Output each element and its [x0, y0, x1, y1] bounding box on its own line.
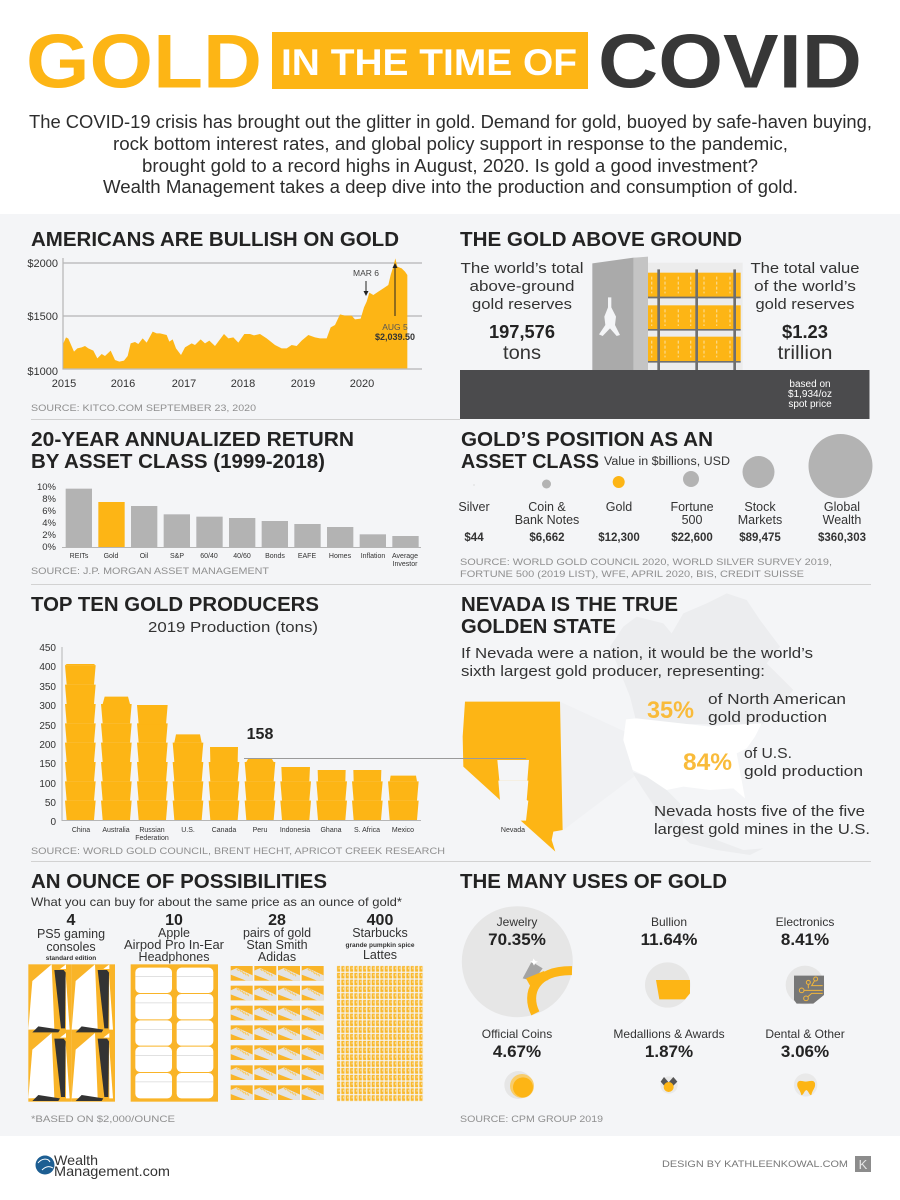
callout: Aug 5: AUG 5	[382, 322, 408, 332]
panel: the many uses of gold	[460, 871, 845, 1125]
bar chart: return by asset class: 4%	[42, 518, 57, 529]
stat: 84%	[683, 745, 863, 780]
text block: introduction: The COVID-19 crisis has brought out the glitter in gold. Demand for gold, buoyed by safe-haven buying,	[29, 112, 872, 132]
stat: 84%: gold production	[744, 763, 863, 780]
text block: Nevada mines: largest gold mines in the U.S.	[654, 821, 870, 838]
bubble chart: asset class size: 500	[682, 513, 702, 527]
bar chart: stacked gold bars by country: Mexico	[392, 827, 414, 834]
use: official coins: 4.67%	[493, 1042, 541, 1061]
subheading: What you can buy for about the same price as an ounce of gold*	[31, 895, 402, 909]
heading: annualized return: BY ASSET CLASS (1999-2018)	[31, 451, 325, 473]
use: dental and other	[765, 1027, 845, 1097]
column: Starbucks lattes: Starbucks	[352, 926, 408, 940]
dark ground bar with spot price note: spot price	[788, 399, 832, 410]
title	[26, 20, 862, 104]
bubble chart: asset class size	[458, 434, 872, 544]
use: bullion	[641, 915, 697, 1008]
bar chart: return by asset class: 60/40	[200, 553, 218, 560]
dark ground bar with spot price note: based on	[789, 379, 831, 390]
dark ground bar with spot price note: $1,934/oz	[788, 389, 832, 400]
bar chart: stacked gold bars by country: 350	[39, 682, 56, 693]
bar chart: return by asset class: Inflation	[361, 553, 385, 560]
chart: gold price area chart: 2017	[172, 378, 196, 390]
source: Kitco: SOURCE: KITCO.COM SEPTEMBER 23, 2020	[31, 403, 256, 414]
bar chart: stacked gold bars by country: 250	[39, 721, 56, 732]
credit: designer: DESIGN BY KATHLEENKOWAL.COM	[662, 1159, 848, 1170]
title: COVID	[598, 20, 862, 104]
chart: gold price area chart: $1500	[27, 311, 58, 323]
use: electronics	[776, 915, 834, 1004]
bar chart: stacked gold bars by country: Canada	[212, 827, 236, 834]
text block: reserves tonnage: tons	[503, 343, 541, 364]
shape: Nevada state	[463, 702, 563, 852]
bar chart: stacked gold bars by country: Ghana	[320, 827, 342, 834]
column: Starbucks lattes: Lattes	[363, 948, 397, 962]
footnote: *BASED ON $2,000/OUNCE	[31, 1114, 175, 1125]
bar chart: return by asset class: 8%	[42, 494, 57, 505]
panel: 20-year annualized return	[31, 429, 421, 577]
heading: possibilities: AN OUNCE OF POSSIBILITIES	[31, 871, 327, 893]
text block: reserves value: The total value	[750, 260, 860, 277]
column: AirPods	[124, 912, 224, 1102]
bubble chart: asset class size: Coin &	[528, 500, 566, 514]
callout: Peru comparison value: 158	[247, 726, 273, 743]
bar chart: stacked gold bars by country: S. Africa	[354, 827, 380, 834]
text block: Nevada intro: If Nevada were a nation, it would be the world’s	[461, 645, 813, 662]
chart: gold price area chart	[27, 258, 422, 390]
text block: Nevada intro: sixth largest gold producer, representing:	[461, 663, 765, 680]
heading: Nevada	[461, 594, 678, 638]
text block: Nevada mines	[654, 803, 870, 838]
stat: 35%: of North American	[708, 691, 846, 708]
heading: position: ASSET CLASS	[461, 451, 599, 473]
logo: WealthManagement.com: Wealth	[54, 1152, 98, 1168]
bar chart: stacked gold bars by country: 400	[39, 662, 56, 673]
bar chart: return by asset class: Homes	[329, 553, 352, 560]
bar chart: stacked gold bars by country: Peru	[253, 827, 267, 834]
bubble chart: asset class size: $44	[464, 532, 484, 544]
bar chart: stacked gold bars by country: Australia	[102, 827, 130, 834]
bar chart: return by asset class: 6%	[42, 506, 57, 517]
use: official coins: Official Coins	[482, 1027, 552, 1041]
bar chart: return by asset class	[37, 482, 421, 568]
bar chart: stacked gold bars by country: 200	[39, 740, 56, 751]
source: World Gold Council	[460, 557, 832, 580]
callout: Mar 6: MAR 6	[353, 268, 379, 278]
column: Adidas shoes	[231, 912, 324, 1100]
stat: 84%: 84%	[683, 749, 732, 776]
bubble chart: asset class size: $6,662	[529, 532, 565, 544]
bar chart: stacked gold bars by country: 300	[39, 701, 56, 712]
text block: reserves value: trillion	[778, 343, 832, 364]
text block: introduction	[29, 112, 872, 197]
use: bullion: 11.64%	[641, 930, 697, 949]
bubble chart: asset class size: Markets	[738, 513, 782, 527]
panel: page background	[0, 214, 900, 1136]
callout: Mar 6	[353, 268, 379, 296]
panel: top ten gold producers	[31, 594, 450, 857]
bubble chart: asset class size: Stock	[744, 500, 776, 514]
logo: WealthManagement.com	[36, 1152, 170, 1179]
text block: reserves tonnage: 197,576	[489, 322, 555, 342]
use: dental and other: Dental & Other	[765, 1027, 845, 1041]
text block: reserves tonnage: gold reserves	[472, 296, 572, 313]
column: Starbucks lattes: grande pumpkin spice	[346, 942, 415, 949]
heading: bullish: AMERICANS ARE BULLISH ON GOLD	[31, 229, 399, 251]
bar chart: stacked gold bars by country: U.S.	[181, 827, 195, 834]
heading: Nevada: NEVADA IS THE TRUE	[461, 594, 678, 616]
bar chart: return by asset class: Investor	[393, 561, 418, 568]
panel: Americans are bullish on gold	[27, 229, 422, 414]
source: World Gold Council, Hecht: SOURCE: WORLD GOLD COUNCIL, BRENT HECHT, APRICOT CREEK RESEARCH	[31, 846, 445, 857]
chart: gold price area chart: 2020	[350, 378, 374, 390]
source: World Gold Council: SOURCE: WORLD GOLD COUNCIL 2020, WORLD SILVER SURVEY 2019,	[460, 557, 832, 568]
heading: above ground: THE GOLD ABOVE GROUND	[460, 229, 742, 251]
use: bullion: Bullion	[651, 915, 687, 929]
panel: the gold above ground	[460, 229, 870, 419]
bubble chart: asset class size: Wealth	[823, 513, 861, 527]
stat: 35%: 35%	[647, 697, 694, 724]
use: jewelry: Jewelry	[497, 915, 537, 929]
use: official coins	[482, 1027, 552, 1099]
text block: reserves value	[750, 260, 860, 364]
bar chart: return by asset class: Average	[392, 553, 418, 560]
credit: designer: K	[859, 1157, 868, 1172]
bar chart: return by asset class: 10%	[37, 482, 57, 493]
bubble chart: asset class size: Bank Notes	[515, 513, 579, 527]
column: PS5 consoles: standard edition	[46, 955, 96, 962]
heading: Nevada: GOLDEN STATE	[461, 616, 616, 638]
stat: 84%: of U.S.	[744, 745, 792, 762]
bar chart: return by asset class: 40/60	[233, 553, 251, 560]
stat: 35%: gold production	[708, 709, 827, 726]
source: JP Morgan: SOURCE: J.P. MORGAN ASSET MANAGEMENT	[31, 566, 269, 577]
bar chart: return by asset class: 2%	[42, 530, 57, 541]
heading: annualized return: 20-YEAR ANNUALIZED RETURN	[31, 429, 354, 451]
heading: producers: TOP TEN GOLD PRODUCERS	[31, 594, 319, 616]
text block: Nevada mines: Nevada hosts five of the five	[654, 803, 865, 820]
chart: gold price area chart: 2016	[111, 378, 135, 390]
column: Starbucks lattes: 400	[367, 912, 393, 929]
use: jewelry: 70.35%	[488, 930, 546, 949]
column: AirPods: Airpod Pro In-Ear	[124, 938, 224, 952]
bar chart: return by asset class: EAFE	[298, 553, 316, 560]
heading: position: GOLD’S POSITION AS AN	[461, 429, 713, 451]
Nevada label: Nevada	[501, 827, 525, 834]
bubble chart: asset class size: Global	[824, 500, 860, 514]
use: electronics: 8.41%	[781, 930, 829, 949]
text block: reserves value: of the world’s	[754, 278, 856, 295]
illustration: vault with gold shelves	[592, 257, 743, 370]
bar chart: stacked gold bars by country: 150	[39, 759, 56, 770]
column: PS5 consoles: consoles	[46, 940, 96, 954]
text block: introduction: Wealth Management takes a deep dive into the production and consumption of gold.	[103, 177, 798, 197]
bar chart: stacked gold bars by country	[39, 643, 450, 842]
text block: introduction: brought gold to a record highs in August, 2020. Is gold a good investment?	[142, 156, 758, 176]
bubble chart: asset class size: Fortune	[670, 500, 714, 514]
chart subtitle: 2019 Production (tons)	[148, 619, 318, 636]
column: AirPods: Apple	[158, 926, 190, 940]
bar chart: return by asset class: Bonds	[265, 553, 285, 560]
callout: Aug 5: $2,039.50	[375, 332, 415, 342]
title: GOLD	[26, 20, 262, 104]
bubble chart: asset class size: Silver	[458, 500, 490, 514]
column: Adidas shoes: Stan Smith	[246, 938, 308, 952]
column: Adidas shoes: pairs of gold	[243, 926, 311, 940]
panel: gold's position as an asset class	[458, 429, 872, 580]
bar chart: stacked gold bars by country: China	[72, 827, 90, 834]
column: PS5 consoles	[28, 912, 115, 1102]
source: World Gold Council: FORTUNE 500 (2019 LIST), WFE, APRIL 2020, BIS, CREDIT SUISSE	[460, 569, 804, 580]
use: medallions and awards: Medallions & Awards	[613, 1027, 725, 1041]
panel: an ounce of possibilities	[28, 871, 423, 1125]
chart: gold price area chart: $1000	[27, 366, 58, 378]
text block: reserves tonnage	[460, 260, 584, 364]
column: Adidas shoes: Adidas	[258, 950, 296, 964]
bar chart: return by asset class: 0%	[42, 542, 57, 553]
heading: annualized return	[31, 429, 354, 473]
use: jewelry	[462, 906, 573, 1017]
title: IN THE TIME OF	[281, 42, 577, 83]
bubble chart: asset class size: Gold	[606, 500, 632, 514]
bar chart: stacked gold bars by country: Indonesia	[280, 827, 310, 834]
panel: Nevada is the true golden state	[450, 593, 870, 855]
chart: gold price area chart: $2000	[27, 258, 58, 270]
bar chart: stacked gold bars by country: 0	[50, 817, 56, 828]
bar chart: stacked gold bars by country: 50	[45, 798, 56, 809]
text block: introduction: rock bottom interest rates, and global policy support in response to the pandemic,	[113, 134, 788, 154]
bar chart: stacked gold bars by country: Russian	[139, 827, 165, 834]
bubble chart: asset class size: $12,300	[598, 532, 640, 544]
heading: uses: THE MANY USES OF GOLD	[460, 871, 727, 893]
dark ground bar with spot price note	[460, 370, 870, 419]
stat: 35%	[647, 691, 846, 726]
use: medallions and awards	[613, 1027, 725, 1094]
use: dental and other: 3.06%	[781, 1042, 829, 1061]
chart: gold price area chart: 2018	[231, 378, 255, 390]
bubble chart: asset class size: $22,600	[671, 532, 713, 544]
unit note: Value in $billions, USD	[604, 456, 730, 468]
text block: Nevada intro	[461, 645, 813, 680]
bar chart: stacked gold bars by country: 450	[39, 643, 56, 654]
column: AirPods: Headphones	[139, 950, 209, 964]
column: Adidas shoes: 28	[268, 912, 286, 929]
credit: designer	[662, 1156, 871, 1172]
source: CPM Group: SOURCE: CPM GROUP 2019	[460, 1114, 603, 1125]
bar chart: stacked gold bars by country: Federation	[135, 835, 169, 842]
map: North America with US highlighted	[463, 593, 793, 855]
bar chart: return by asset class: Gold	[104, 553, 118, 560]
column: PS5 consoles: PS5 gaming	[37, 927, 105, 941]
chart: gold price area chart: 2015	[52, 378, 76, 390]
chart: gold price area chart: 2019	[291, 378, 315, 390]
bar chart: return by asset class: S&P	[170, 553, 184, 560]
bar chart: return by asset class: REITs	[70, 553, 89, 560]
heading: position	[461, 429, 713, 473]
logo: WealthManagement.com: Management.com	[54, 1163, 170, 1179]
bubble chart: asset class size: $89,475	[739, 532, 781, 544]
use: medallions and awards: 1.87%	[645, 1042, 693, 1061]
column: PS5 consoles: 4	[67, 912, 76, 929]
column: Starbucks lattes	[337, 912, 423, 1102]
text block: reserves tonnage: above-ground	[470, 278, 574, 295]
text block: reserves tonnage: The world’s total	[460, 260, 584, 277]
bubble chart: asset class size: $360,303	[818, 532, 866, 544]
text block: reserves value: gold reserves	[756, 296, 854, 313]
callout: Aug 5	[375, 263, 415, 342]
column: AirPods: 10	[165, 912, 183, 929]
bar chart: return by asset class: Oil	[140, 553, 149, 560]
text block: reserves value: $1.23	[782, 322, 828, 342]
bar chart: stacked gold bars by country: 100	[39, 779, 56, 790]
use: electronics: Electronics	[776, 915, 834, 929]
